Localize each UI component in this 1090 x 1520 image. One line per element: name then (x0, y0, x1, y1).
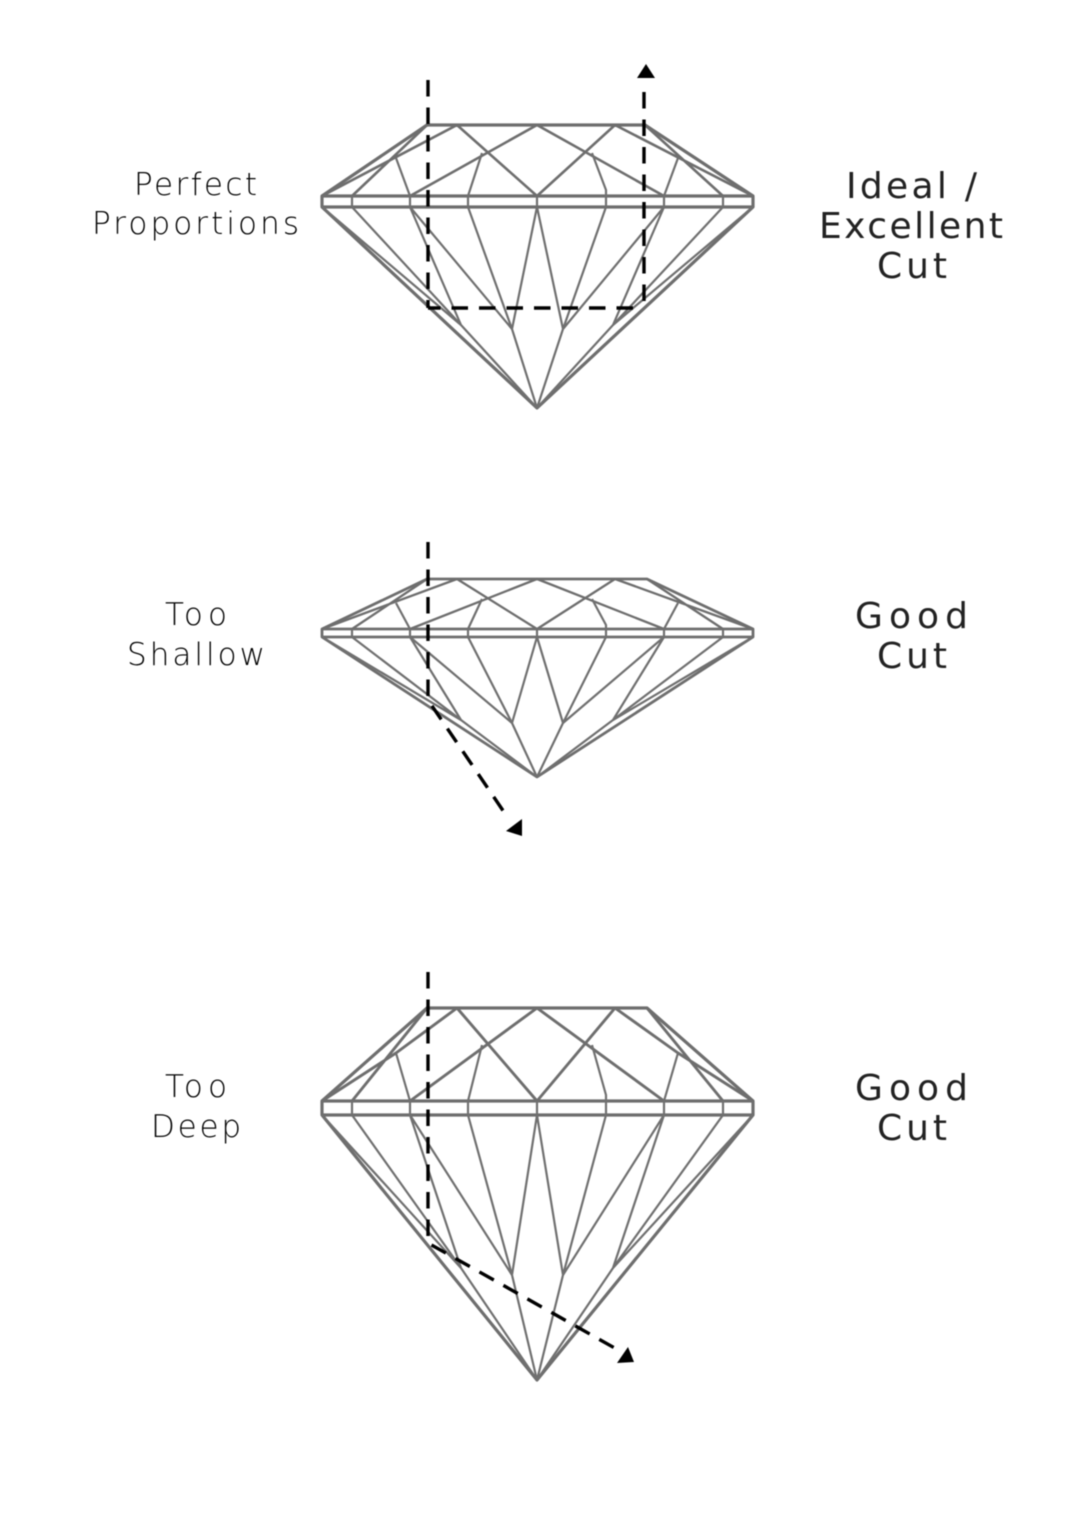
label: perfect proportions: Proportions (92, 206, 299, 242)
light path: leaking through the side (428, 972, 634, 1363)
row: too shallow (127, 542, 968, 836)
label: too shallow: Shallow (127, 637, 265, 673)
rating: ideal excellent cut: Ideal / (846, 166, 978, 207)
diamond: deep proportions (322, 1008, 753, 1380)
diamond: ideal proportions (322, 125, 753, 408)
rating: good cut: Good (855, 1068, 968, 1109)
rating: ideal excellent cut: Excellent (819, 206, 1003, 247)
row: too deep (151, 972, 968, 1380)
rating: good cut: Cut (877, 1108, 947, 1149)
rating: ideal excellent cut: Cut (877, 246, 947, 287)
label: too shallow (127, 597, 265, 673)
label: perfect proportions: Perfect (134, 167, 257, 203)
label: too shallow: Too (165, 597, 227, 633)
light path: reflected back through the top (428, 64, 655, 308)
label: too deep (151, 1069, 241, 1145)
light path: leaking through the bottom (428, 542, 522, 836)
diamond: shallow proportions (322, 579, 753, 777)
rating: good cut: Good (855, 596, 968, 637)
row: perfect proportions (92, 64, 1003, 408)
rating: ideal excellent cut (819, 166, 1003, 287)
label: too deep: Deep (151, 1109, 241, 1145)
label: perfect proportions (92, 167, 299, 242)
rating: good cut (855, 1068, 968, 1149)
label: too deep: Too (165, 1069, 227, 1105)
rating: good cut (855, 596, 968, 677)
rating: good cut: Cut (877, 636, 947, 677)
